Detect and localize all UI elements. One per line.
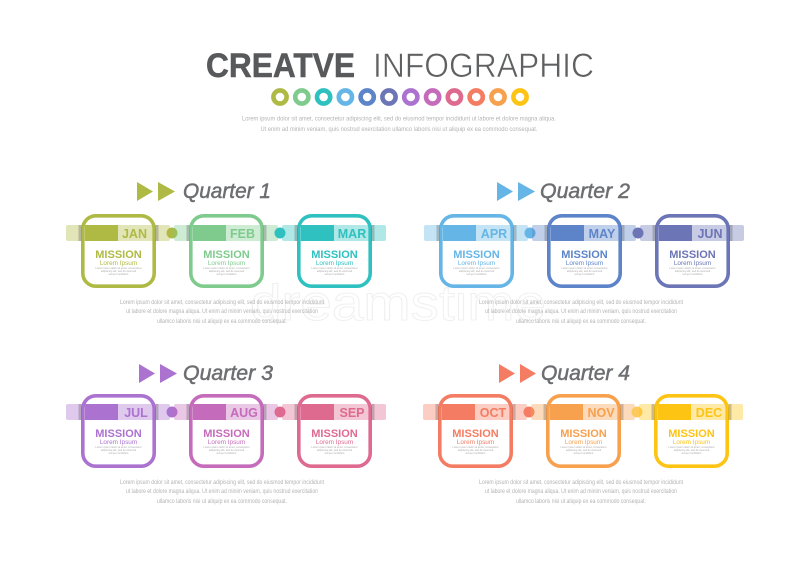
card: february [174,216,278,286]
card: march [282,216,386,286]
card: august: Lorem ipsum dolor sit amet, consectetur [203,445,250,449]
card: may: tempor incididunt [575,272,595,276]
card: september: Lorem ipsum dolor sit amet, consectetur [311,445,358,449]
dot: nov-dec [632,406,642,418]
card: october: Lorem Ipsum [457,439,494,446]
card: november [531,396,635,466]
dot: jan-feb [166,228,178,238]
card: september [282,396,386,466]
card: june: JUN [697,227,723,241]
card: october: adipiscing elit, sed do eiusmod [458,448,494,452]
card: november: tempor incididunt [574,451,594,455]
dot: apr-may [524,228,536,238]
card: november: MISSION [560,428,607,440]
card: june: Lorem ipsum dolor sit amet, consectetur [669,266,716,270]
card: august [174,396,278,466]
card: march: Lorem ipsum dolor sit amet, consectetur [311,266,358,270]
card: april: tempor incididunt [467,272,487,276]
description: quarter 3: ut labore et dolore magna aliqua. Ut enim ad minim veniam, quis nostrud exercitation [126,489,318,495]
card: january: MISSION [95,249,142,261]
card: april: MISSION [453,249,500,261]
card: april: Lorem ipsum dolor sit amet, consectetur [453,266,500,270]
card: may: MAY [589,227,616,241]
card: january: JAN [122,227,147,241]
description: quarter 2: ut labore et dolore magna aliqua. Ut enim ad minim veniam, quis nostrud exercitation [485,309,677,315]
card: april: APR [481,227,507,241]
card: february: FEB [230,227,255,241]
card: july: tempor incididunt [109,451,129,455]
dot: may-jun [632,228,644,238]
card: december [639,396,743,466]
card: may: adipiscing elit, sed do eiusmod [567,269,603,273]
card: february: Lorem Ipsum [208,260,245,267]
panel: quarter 3 [66,361,386,505]
card: january: Lorem Ipsum [100,260,137,267]
description: quarter 1: ullamco laboris nisi ut aliquip ex ea commodo consequat. [157,319,287,325]
card: july: JUL [124,406,148,420]
card: march: MISSION [311,249,358,261]
panel: quarter 1 [66,179,386,325]
description: quarter 2 [479,300,683,325]
description: quarter 1: Lorem ipsum dolor sit amet, consectetur adipiscing elit, sed do eiusmod tempor incididunt [120,300,324,306]
heading: quarter 2 [497,179,630,203]
heading: quarter 4: Quarter 4 [541,361,630,385]
card: march: adipiscing elit, sed do eiusmod [317,269,353,273]
card: january: Lorem ipsum dolor sit amet, consectetur [95,266,142,270]
card: january: adipiscing elit, sed do eiusmod [101,269,137,273]
heading: quarter 4 [499,361,630,385]
card: september: SEP [339,406,365,420]
card: october: tempor incididunt [466,451,486,455]
card: december: Lorem Ipsum [673,439,710,446]
description: quarter 4: ullamco laboris nisi ut aliquip ex ea commodo consequat. [516,499,646,505]
card: september: tempor incididunt [325,451,345,455]
card: october [423,396,527,466]
card: october: Lorem ipsum dolor sit amet, consectetur [452,445,499,449]
card: august: MISSION [203,428,250,440]
card: december: Lorem ipsum dolor sit amet, consectetur [668,445,715,449]
card: february: tempor incididunt [217,272,237,276]
description: quarter 3 [120,480,324,505]
card: august: adipiscing elit, sed do eiusmod [209,448,245,452]
heading: quarter 1 [137,179,271,203]
dot: feb-mar [274,228,286,238]
card: august: tempor incididunt [217,451,237,455]
description: quarter 4: ut labore et dolore magna aliqua. Ut enim ad minim veniam, quis nostrud exercitation [485,489,677,495]
card: august: AUG [230,406,258,420]
card: february: adipiscing elit, sed do eiusmod [209,269,245,273]
card: september: adipiscing elit, sed do eiusmod [317,448,353,452]
heading: quarter 3: Quarter 3 [183,361,273,385]
title: INFOGRAPHIC [373,47,594,85]
card: november: Lorem Ipsum [565,439,602,446]
card: september: MISSION [311,428,358,440]
card: may [532,216,636,286]
card: july: Lorem ipsum dolor sit amet, consectetur [95,445,142,449]
card: may: Lorem ipsum dolor sit amet, consectetur [561,266,608,270]
intro text [242,116,556,133]
card: july: MISSION [95,428,142,440]
title: CREATVE [206,47,355,85]
panel: quarter 4 [423,361,743,505]
card: april: adipiscing elit, sed do eiusmod [459,269,495,273]
card: june [640,216,744,286]
description: quarter 4 [479,480,683,505]
description: quarter 3: Lorem ipsum dolor sit amet, consectetur adipiscing elit, sed do eiusmod tempor incididunt [120,480,324,486]
card: september: Lorem Ipsum [316,439,353,446]
dot: aug-sep [274,406,286,418]
description: quarter 1: ut labore et dolore magna aliqua. Ut enim ad minim veniam, quis nostrud exercitation [126,309,318,315]
description: quarter 4: Lorem ipsum dolor sit amet, consectetur adipiscing elit, sed do eiusmod tempor incididunt [479,480,683,486]
card: october: MISSION [452,428,499,440]
card: august: Lorem Ipsum [208,439,245,446]
card: october: OCT [480,406,507,420]
description: quarter 2: Lorem ipsum dolor sit amet, consectetur adipiscing elit, sed do eiusmod tempor incididunt [479,300,683,306]
card: march: MAR [338,227,366,241]
ring row [273,90,527,104]
panel: quarter 2 [424,179,744,325]
card: november: Lorem ipsum dolor sit amet, consectetur [560,445,607,449]
card: november: NOV [587,406,615,420]
title [206,47,594,85]
heading: quarter 3 [139,361,273,385]
card: january [66,216,170,286]
card: february: Lorem ipsum dolor sit amet, consectetur [203,266,250,270]
intro text: Lorem ipsum dolor sit amet, consectetur adipiscing elit, sed do eiusmod tempor incididunt ut labore et dolore magna aliqua. [242,116,556,122]
card: april [424,216,528,286]
description: quarter 3: ullamco laboris nisi ut aliquip ex ea commodo consequat. [157,499,287,505]
card: december: DEC [696,406,722,420]
card: march: tempor incididunt [325,272,345,276]
heading: quarter 2: Quarter 2 [540,179,630,203]
heading: quarter 1: Quarter 1 [183,179,271,203]
watermark: dreamstime [250,275,546,331]
intro text: Ut enim ad minim veniam, quis nostrud exercitation ullamco laboris nisi ut aliquip ex ea commodo consequat. [260,127,538,133]
card: april: Lorem Ipsum [458,260,495,267]
card: june: Lorem Ipsum [674,260,711,267]
card: may: MISSION [561,249,608,261]
card: march: Lorem Ipsum [316,260,353,267]
dot: jul-aug [166,406,178,418]
description: quarter 1 [120,300,324,325]
card: may: Lorem Ipsum [566,260,603,267]
dot: oct-nov [524,406,534,418]
card: december: MISSION [668,428,715,440]
card: december: tempor incididunt [682,451,702,455]
card: june: adipiscing elit, sed do eiusmod [675,269,711,273]
card: july: Lorem Ipsum [100,439,137,446]
card: january: tempor incididunt [109,272,129,276]
card: july [66,396,170,466]
card: november: adipiscing elit, sed do eiusmod [566,448,602,452]
card: december: adipiscing elit, sed do eiusmod [674,448,710,452]
card: july: adipiscing elit, sed do eiusmod [101,448,137,452]
card: june: MISSION [669,249,716,261]
description: quarter 2: ullamco laboris nisi ut aliquip ex ea commodo consequat. [516,319,646,325]
card: june: tempor incididunt [683,272,703,276]
card: february: MISSION [203,249,250,261]
